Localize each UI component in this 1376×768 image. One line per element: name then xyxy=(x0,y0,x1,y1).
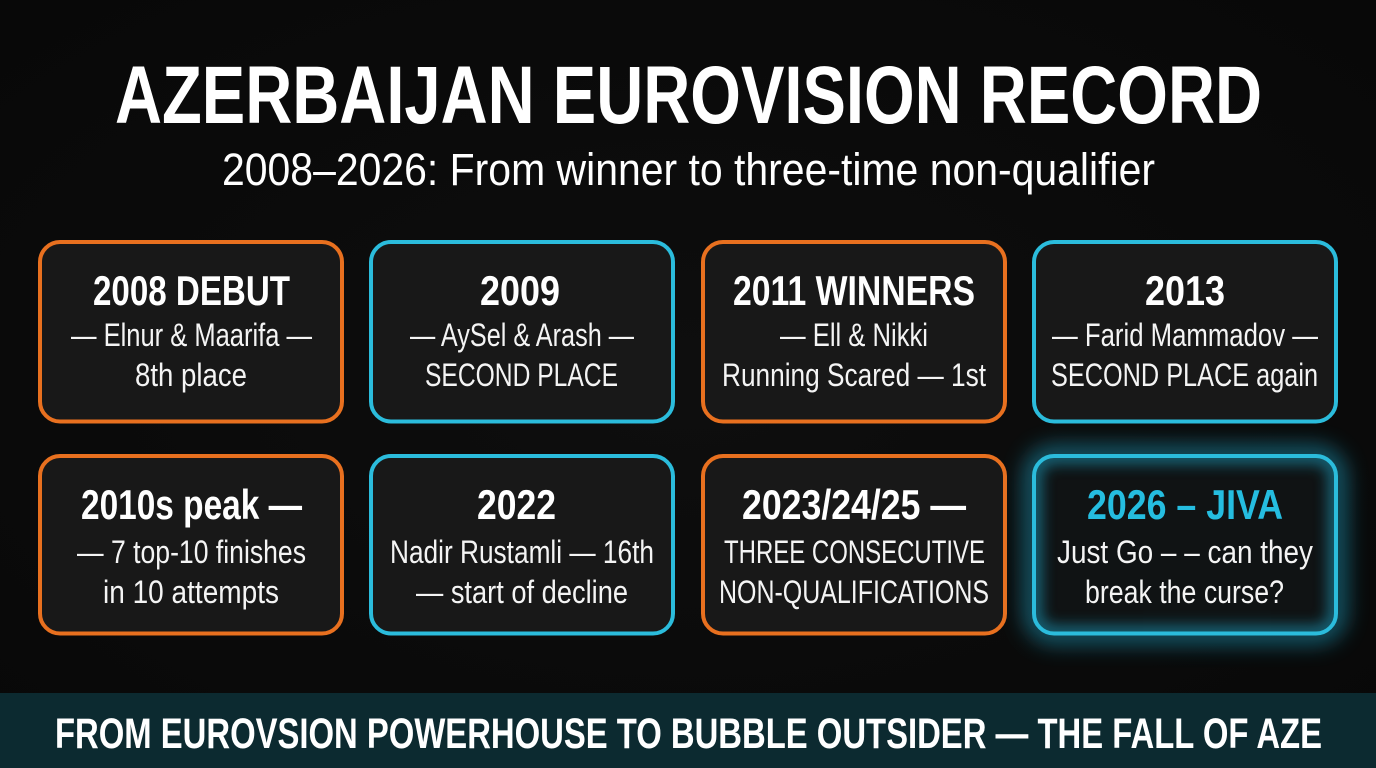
heading: 2010s peak: 2010s peak — xyxy=(81,481,302,528)
text: Nadir Rustamli xyxy=(390,534,654,610)
text: Farid Mammadov: — Farid Mammadov — xyxy=(1052,317,1318,353)
heading: 2009: 2009 xyxy=(480,267,560,314)
text: Elnur and Maarifa xyxy=(71,317,312,393)
text: Ell and Nikki xyxy=(722,317,986,393)
panel: 2023 to 2025 xyxy=(703,456,1005,634)
text: AySel and Arash: — AySel & Arash — xyxy=(410,317,634,353)
text: Farid Mammadov xyxy=(1051,317,1318,393)
panel: 2022 xyxy=(371,456,673,634)
subtitle: 2008–2026: From winner to three-time non-qualifier xyxy=(222,144,1155,195)
text: Just Go: Just Go – – can they xyxy=(1057,534,1313,570)
text: Elnur and Maarifa: — Elnur & Maarifa — xyxy=(71,317,312,353)
text: AySel and Arash: SECOND PLACE xyxy=(425,357,618,393)
text: Ell and Nikki: Running Scared — 1st xyxy=(722,357,986,393)
heading: 2011 winners: 2011 WINNERS xyxy=(733,267,975,314)
footer banner xyxy=(0,693,1376,768)
heading: 2022: 2022 xyxy=(477,481,556,528)
text: top-10 finishes xyxy=(77,534,306,610)
text: Just Go: break the curse? xyxy=(1085,574,1284,610)
text: three consecutive non-qualifications: NON-QUALIFICATIONS xyxy=(719,574,989,610)
text: Elnur and Maarifa: 8th place xyxy=(135,357,247,393)
text: Nadir Rustamli: — start of decline xyxy=(416,574,628,610)
panel: 2011 winners xyxy=(703,242,1005,422)
panel: 2026 Jiva highlighted xyxy=(1034,456,1336,634)
panel: 2013 xyxy=(1034,242,1336,422)
text: top-10 finishes: — 7 top-10 finishes xyxy=(77,534,306,570)
heading: 2026 Jiva: 2026 – JIVA xyxy=(1087,481,1283,528)
text: three consecutive non-qualifications: THREE CONSECUTIVE xyxy=(724,534,985,570)
heading: 2013: 2013 xyxy=(1145,267,1225,314)
heading: 2023/24/25: 2023/24/25 — xyxy=(742,481,966,528)
panel: 2010s peak xyxy=(40,456,342,634)
panel: 2008 debut xyxy=(40,242,342,422)
text: AySel and Arash xyxy=(410,317,634,393)
text: Nadir Rustamli: Nadir Rustamli — 16th xyxy=(390,534,654,570)
heading: 2008 debut: 2008 DEBUT xyxy=(93,267,290,314)
text: Just Go xyxy=(1057,534,1313,610)
text: Ell and Nikki: — Ell & Nikki xyxy=(780,317,928,353)
text: three consecutive non-qualifications xyxy=(719,534,989,610)
text: top-10 finishes: in 10 attempts xyxy=(103,574,279,610)
panel: 2009 xyxy=(371,242,673,422)
